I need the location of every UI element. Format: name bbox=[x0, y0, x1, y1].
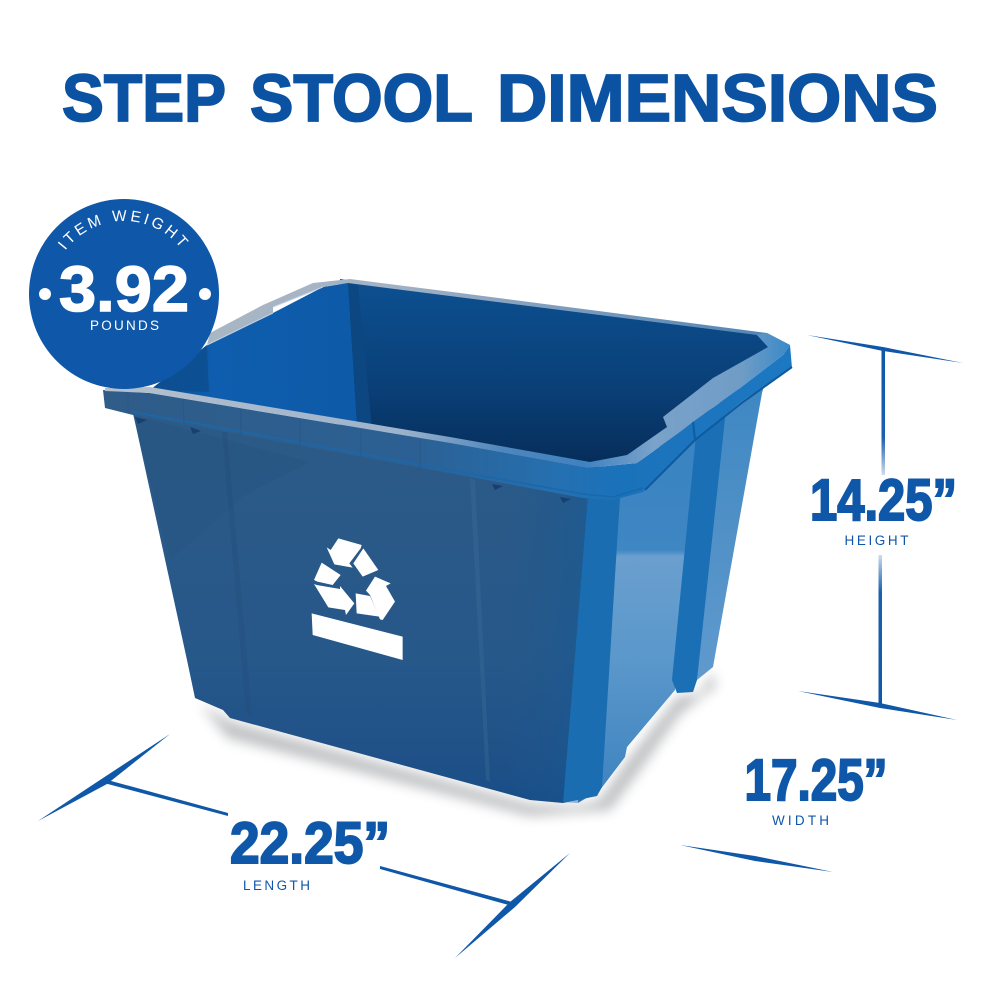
height top tick bbox=[807, 335, 963, 363]
bin back rim bbox=[207, 279, 790, 347]
bin rim top surface bbox=[105, 333, 790, 468]
title bbox=[62, 61, 938, 136]
length left tick bbox=[38, 734, 170, 821]
height bottom tick bbox=[798, 691, 957, 720]
height line lower bbox=[878, 555, 882, 705]
badge value: 3.92 bbox=[59, 253, 189, 325]
height line upper bbox=[882, 350, 885, 475]
width tick bbox=[680, 845, 833, 872]
bin right side outer panel bbox=[697, 372, 768, 680]
width value: 17.25” bbox=[744, 748, 888, 813]
bin interior back wall bbox=[340, 279, 775, 470]
bin interior left wall bbox=[150, 283, 357, 424]
width dimension bbox=[680, 748, 888, 872]
badge curved label: ITEM WEIGHT bbox=[58, 210, 189, 250]
title: STEP bbox=[62, 61, 226, 136]
height label: HEIGHT bbox=[844, 533, 908, 548]
badge unit: POUNDS bbox=[90, 318, 159, 333]
width label: WIDTH bbox=[772, 813, 829, 828]
length line left bbox=[104, 779, 228, 816]
bin corner stripe bbox=[563, 495, 620, 803]
length label: LENGTH bbox=[243, 878, 310, 893]
icon: recycling symbol with label bar bbox=[312, 538, 403, 660]
length right tick bbox=[455, 853, 570, 958]
bin right side light panel bbox=[578, 425, 698, 803]
title: DIMENSIONS bbox=[497, 61, 938, 136]
length value: 22.25” bbox=[230, 811, 390, 876]
bin side recessed stripe bbox=[672, 400, 727, 693]
bin rim front face bbox=[103, 345, 792, 500]
title: STOOL bbox=[250, 61, 473, 136]
height value: 14.25” bbox=[810, 468, 957, 533]
length line right bbox=[380, 866, 512, 906]
bin rim segments bbox=[128, 394, 420, 468]
bin small clips bbox=[135, 417, 571, 503]
bin front panel bbox=[133, 413, 620, 803]
bin rim lip line bbox=[133, 412, 643, 497]
badge dot right bbox=[199, 288, 211, 300]
bin ground shadow bbox=[200, 672, 716, 816]
bin interior corner shade bbox=[348, 283, 372, 428]
bin front panel details bbox=[133, 415, 310, 560]
product: blue recycling bin bbox=[103, 279, 792, 816]
badge: item weight bbox=[29, 199, 219, 389]
badge dot left bbox=[39, 288, 51, 300]
length dimension bbox=[38, 734, 570, 958]
height dimension bbox=[798, 335, 963, 720]
